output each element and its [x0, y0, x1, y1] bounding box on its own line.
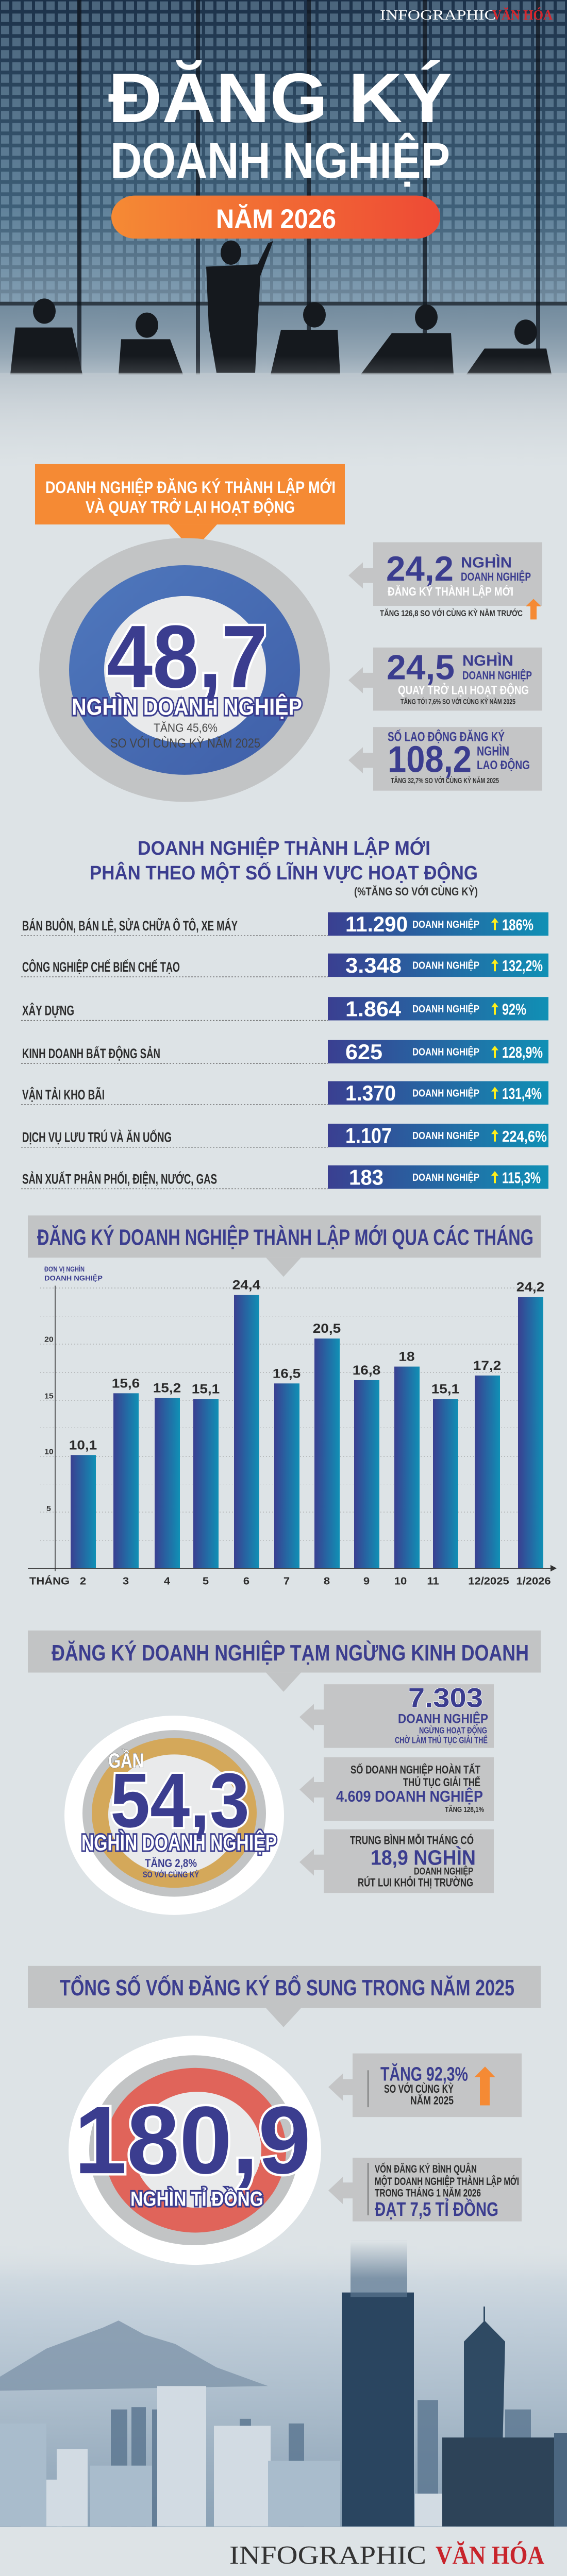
row: accommodation: DỊCH VỤ LƯU TRÚ VÀ ĂN UỐNG [22, 1129, 172, 1145]
stat box: 7.303: 7.303 [408, 1683, 483, 1713]
bar chart: monthly: 11 [427, 1576, 439, 1587]
stat box: 24,5 returned: TĂNG TỚI 7,6% SO VỚI CÙNG KỲ NĂM 2025 [401, 697, 515, 706]
bar chart: monthly: 10 [44, 1448, 54, 1456]
bar chart: monthly: 15,6 [112, 1376, 140, 1391]
stat box: 24,5 returned [348, 648, 542, 710]
row: construction: 1.864 [345, 997, 402, 1021]
row: wholesale retail: BÁN BUÔN, BÁN LẺ, SỬA CHỮA Ô TÔ, XE MÁY [22, 918, 238, 934]
stat box: 18,9 per month: DOANH NGHIỆP [414, 1866, 473, 1877]
bar chart: monthly: 10 [394, 1576, 407, 1587]
stat box: 24,5 returned: DOANH NGHIỆP [462, 669, 532, 682]
row: construction: 92% [502, 1001, 526, 1018]
bar chart: monthly: 7 [284, 1576, 290, 1587]
row: utilities: DOANH NGHIỆP [412, 1172, 479, 1183]
row: utilities: 183 [349, 1165, 383, 1190]
stat box: labour 108,2: LAO ĐỘNG [477, 758, 530, 772]
stat box: 18,9 per month: TRUNG BÌNH MỖI THÁNG CÓ [350, 1834, 474, 1846]
stat box: 18,9 per month [299, 1829, 494, 1893]
stat box: capital increase 92,3% [328, 2054, 522, 2117]
stat box: capital increase 92,3%: NĂM 2025 [410, 2094, 454, 2107]
row: manufacturing: 132,2% [502, 957, 543, 975]
bar chart: monthly: 2 [80, 1576, 86, 1587]
stat box: dissolved 4.609: SỐ DOANH NGHIỆP HOÀN TẤT [351, 1764, 480, 1776]
brand top [380, 7, 553, 23]
row: construction: DOANH NGHIỆP [412, 1003, 479, 1015]
row: manufacturing [21, 954, 548, 977]
section 4 heading [28, 1631, 541, 1692]
bar chart: monthly: 3 [123, 1576, 129, 1587]
section 1 banner [35, 464, 345, 551]
capital circle: 180,9 [69, 2036, 321, 2265]
stat box: 7.303 [299, 1683, 494, 1748]
row: real estate: 625 [345, 1040, 382, 1064]
row: wholesale retail: 186% [502, 916, 533, 934]
row: transport: 1.370 [345, 1081, 396, 1105]
bar chart: monthly: 16,5 [273, 1366, 301, 1381]
footer brand: VĂN HÓA [436, 2540, 544, 2570]
bar chart: monthly: 24,2 [516, 1280, 544, 1294]
stat box: labour 108,2 [348, 727, 542, 791]
bar chart: monthly: 18 [398, 1349, 415, 1364]
bar chart: monthly: 16,8 [353, 1363, 380, 1378]
bar chart: monthly: 24,4 [232, 1278, 260, 1292]
stat box: labour 108,2: SỐ LAO ĐỘNG ĐĂNG KÝ [388, 728, 505, 744]
section 5 heading [28, 1966, 541, 2027]
sector rows [21, 912, 548, 1190]
bar chart: monthly [28, 1265, 557, 1587]
row: accommodation: 224,6% [502, 1127, 547, 1145]
main circle: 48,7: NGHÌN DOANH NGHIỆP [72, 693, 302, 720]
suspended circle: 54,3: TĂNG 2,8% [145, 1857, 197, 1870]
stat box: dissolved 4.609: THỦ TỤC GIẢI THỂ [403, 1776, 480, 1789]
stat box: labour 108,2: 108,2 [388, 739, 472, 781]
row: real estate [21, 1040, 548, 1064]
stat box: capital increase 92,3%: TĂNG 92,3% [380, 2063, 468, 2085]
bar chart: monthly: 10,1 [69, 1437, 97, 1452]
section 2 heading: DOANH NGHIỆP THÀNH LẬP MỚI [138, 837, 430, 859]
year pill [111, 196, 440, 239]
row: construction [21, 997, 548, 1021]
row: transport: VẬN TẢI KHO BÃI [22, 1086, 105, 1103]
section 2 heading: (%TĂNG SO VỚI CÙNG KỲ) [354, 885, 478, 898]
stat box: dissolved 4.609: 4.609 DOANH NGHIỆP [336, 1787, 483, 1805]
bar chart: monthly: 4 [164, 1576, 170, 1587]
bar chart: monthly: 1/2026 [516, 1576, 551, 1587]
bar chart: monthly: 9 [363, 1576, 370, 1587]
bar chart: monthly: 15,1 [431, 1382, 459, 1396]
brand top: VĂN HÓA [492, 7, 553, 23]
bar chart: monthly: 5 [46, 1505, 51, 1513]
stat box: 18,9 per month: 18,9 NGHÌN [371, 1846, 476, 1870]
title: DOANH NGHIỆP [110, 132, 450, 189]
bar chart: monthly: 20 [44, 1335, 54, 1344]
row: real estate: KINH DOANH BẤT ĐỘNG SẢN [22, 1045, 160, 1062]
stat box: 24,2 new: ĐĂNG KÝ THÀNH LẬP MỚI [388, 585, 513, 599]
stat box: average capital 7,5: TRONG THÁNG 1 NĂM 2026 [375, 2187, 481, 2199]
row: accommodation: 1.107 [345, 1124, 392, 1148]
row: utilities [21, 1165, 548, 1190]
row: accommodation [21, 1124, 548, 1148]
bar chart: monthly: DOANH NGHIỆP [44, 1274, 103, 1282]
suspended circle: 54,3: SO VỚI CÙNG KỲ [143, 1870, 199, 1879]
bar chart: monthly: ĐƠN VỊ NGHÌN [44, 1265, 85, 1274]
row: wholesale retail: DOANH NGHIỆP [412, 919, 479, 930]
row: real estate: DOANH NGHIỆP [412, 1046, 479, 1058]
main circle: 48,7: TĂNG 45,6% [154, 721, 218, 735]
bar chart: monthly: 15,2 [153, 1381, 181, 1395]
bar chart: monthly: 12/2025 [468, 1576, 509, 1587]
row: accommodation: DOANH NGHIỆP [412, 1130, 479, 1142]
section 1 banner: VÀ QUAY TRỞ LẠI HOẠT ĐỘNG [86, 497, 295, 517]
stat box: labour 108,2: NGHÌN [477, 743, 509, 758]
row: utilities: SẢN XUẤT PHÂN PHỐI, ĐIỆN, NƯỚC, GAS [22, 1171, 217, 1187]
stat box: 7.303: CHỜ LÀM THỦ TỤC GIẢI THỂ [395, 1735, 488, 1745]
main circle: 48,7 [39, 538, 330, 802]
stat box: dissolved 4.609: TĂNG 128,1% [445, 1806, 484, 1814]
stat box: average capital 7,5: ĐẠT 7,5 TỈ ĐỒNG [375, 2198, 498, 2220]
suspended circle: 54,3: GẦN [108, 1749, 144, 1772]
suspended circle: 54,3: NGHÌN DOANH NGHIỆP [81, 1830, 277, 1855]
year pill: NĂM 2026 [216, 204, 336, 234]
stat box: 24,5 returned: NGHÌN [462, 652, 513, 669]
stat box: 24,2 new: 24,2 [386, 549, 454, 588]
section 2 heading: PHÂN THEO MỘT SỐ LĨNH VỰC HOẠT ĐỘNG [90, 861, 478, 884]
bar chart: monthly: 15,1 [192, 1382, 220, 1396]
title: ĐĂNG KÝ [108, 59, 452, 137]
row: construction: XÂY DỰNG [22, 1002, 74, 1019]
row: wholesale retail [21, 912, 548, 937]
main circle: 48,7: 48,7 [107, 607, 268, 706]
section 2 heading [90, 837, 478, 898]
stat box: 18,9 per month: RÚT LUI KHỎI THỊ TRƯỜNG [358, 1876, 473, 1889]
row: manufacturing: 3.348 [345, 954, 402, 977]
bar chart: monthly: 20,5 [313, 1321, 341, 1336]
brand top: INFOGRAPHIC [380, 7, 496, 23]
stat box: 7.303: DOANH NGHIỆP [398, 1711, 488, 1726]
stat box: 24,5 returned: 24,5 [387, 648, 455, 687]
stat box: average capital 7,5 [328, 2158, 522, 2222]
stat box: dissolved 4.609 [299, 1757, 494, 1821]
row: manufacturing: CÔNG NGHIỆP CHẾ BIẾN CHẾ TẠO [22, 958, 180, 975]
section 3 heading [28, 1215, 541, 1277]
bar chart: monthly: 6 [243, 1576, 249, 1587]
stat box: 7.303: NGỪNG HOẠT ĐỘNG [419, 1725, 487, 1735]
row: utilities: 115,3% [502, 1169, 541, 1187]
suspended circle: 54,3: 54,3 [110, 1757, 249, 1843]
row: transport [21, 1081, 548, 1105]
title [108, 59, 452, 189]
stat box: 24,2 new: DOANH NGHIỆP [461, 570, 531, 583]
stat box: capital increase 92,3%: SO VỚI CÙNG KỲ [384, 2082, 454, 2095]
stat box: 24,2 new: NGHÌN [461, 554, 512, 571]
capital circle: 180,9: NGHÌN TỈ ĐỒNG [130, 2187, 263, 2210]
row: wholesale retail: 11.290 [345, 912, 408, 937]
bar chart: monthly: 17,2 [473, 1358, 501, 1373]
bar chart: monthly: 8 [324, 1576, 330, 1587]
row: transport: 131,4% [502, 1085, 542, 1103]
capital circle: 180,9: 180,9 [74, 2087, 311, 2194]
stat box: labour 108,2: TĂNG 32,7% SO VỚI CÙNG KỲ NĂM 2025 [391, 776, 499, 785]
footer brand: INFOGRAPHIC [229, 2540, 426, 2570]
bar chart: monthly: THÁNG [29, 1576, 70, 1587]
city photo bottom [0, 2241, 567, 2528]
main circle: 48,7: SO VỚI CÙNG KỲ NĂM 2025 [110, 736, 260, 751]
row: real estate: 128,9% [502, 1044, 543, 1061]
bar chart: monthly: 15 [44, 1392, 54, 1400]
section 1 banner: DOANH NGHIỆP ĐĂNG KÝ THÀNH LẬP MỚI [45, 478, 336, 497]
header photo: office meeting [0, 0, 567, 468]
row: transport: DOANH NGHIỆP [412, 1088, 479, 1099]
row: manufacturing: DOANH NGHIỆP [412, 960, 479, 971]
stat box: average capital 7,5: VỐN ĐĂNG KÝ BÌNH QUÂN [375, 2162, 477, 2175]
bar chart: monthly: 5 [203, 1576, 209, 1587]
suspended circle: 54,3 [64, 1716, 284, 1915]
footer brand [0, 2527, 567, 2576]
stat box: 24,2 new [348, 542, 542, 619]
